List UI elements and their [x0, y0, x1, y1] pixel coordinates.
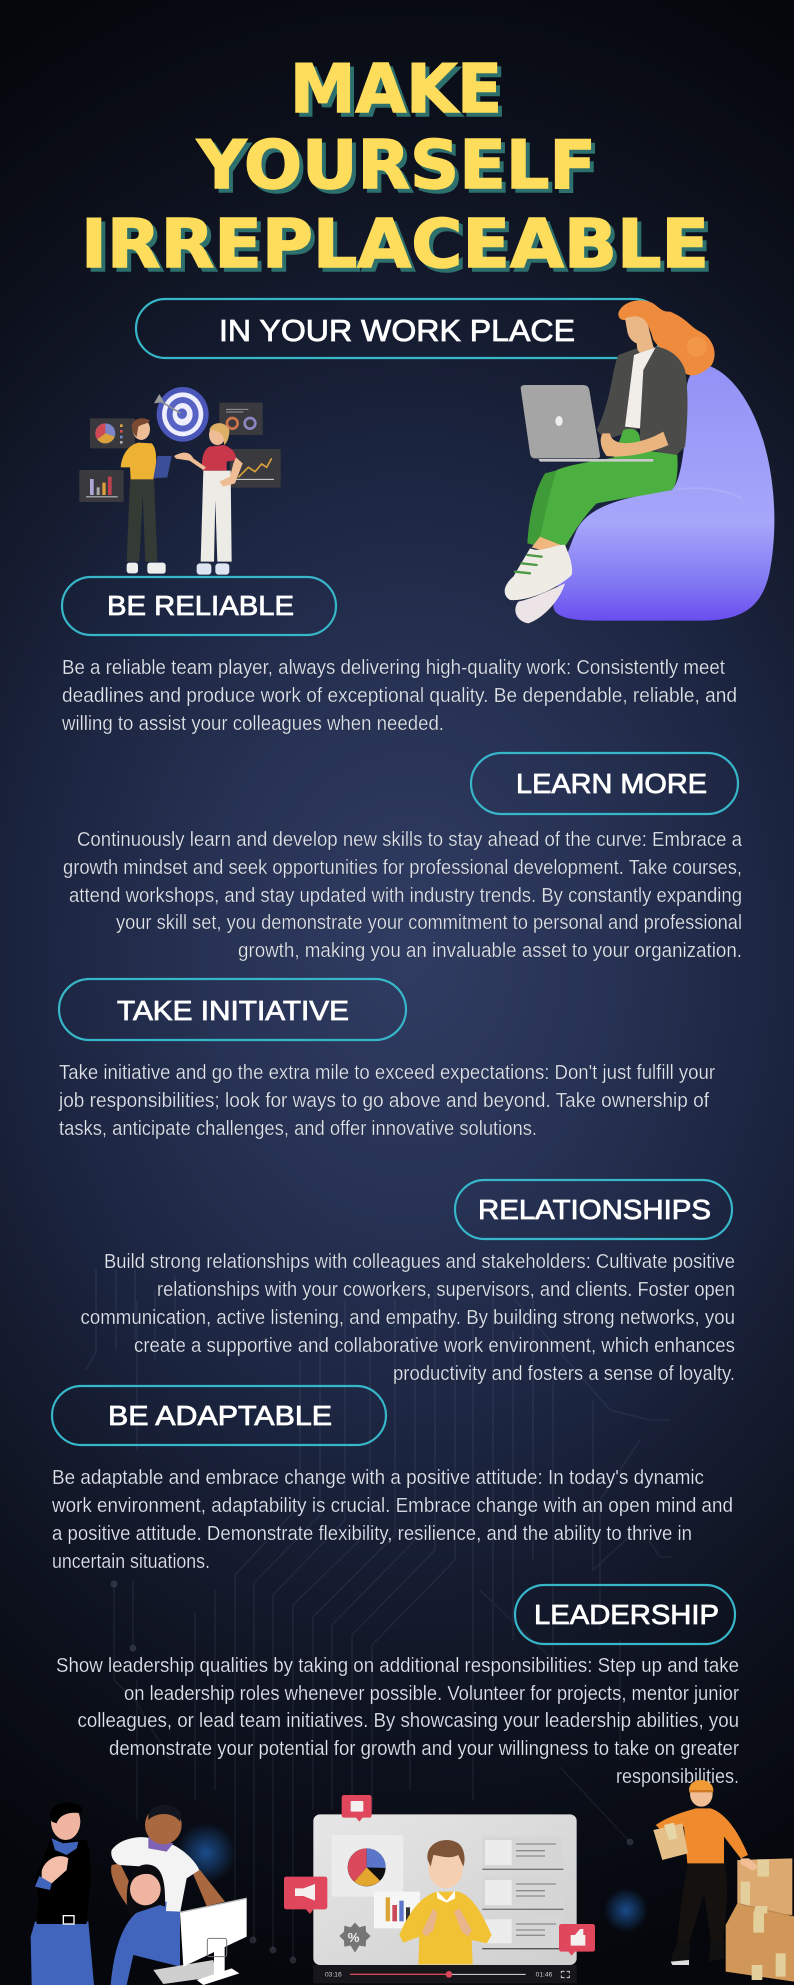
- text block: relationships: communication, active listening, and empathy. By building strong networks, you: [80, 1306, 735, 1329]
- text block: be adaptable: [51, 1466, 733, 1573]
- list rows: [482, 1837, 563, 1949]
- title: MAKE: [294, 54, 506, 132]
- subtitle pill: in your work place: [136, 299, 664, 358]
- person: woman in red shirt: [174, 423, 243, 575]
- text block: learn more: Continuously learn and develop new skills to stay ahead of the curve: Embrace a: [77, 828, 743, 851]
- text block: leadership: colleagues, or lead team initiatives. By showcasing your leadership abilities, you: [78, 1709, 739, 1732]
- heading pill: be adaptable: [52, 1386, 386, 1445]
- text block: leadership: [56, 1654, 739, 1788]
- text block: learn more: growth, making you an invaluable asset to your organization.: [238, 939, 742, 962]
- title: IRREPLACEABLE: [85, 209, 713, 287]
- text block: take initiative: tasks, anticipate challenges, and offer innovative solutions.: [59, 1117, 537, 1140]
- icon: computer monitor and keyboard: [153, 1898, 247, 1985]
- text block: be adaptable: uncertain situations.: [52, 1550, 210, 1573]
- heading pill: learn more: [471, 753, 738, 814]
- text block: leadership: on leadership roles whenever possible. Volunteer for projects, mentor junior: [124, 1682, 739, 1705]
- person: man in black sweater: [31, 1802, 94, 1985]
- text block: take initiative: job responsibilities; look for ways to go above and beyond. Take ownership of: [58, 1089, 709, 1112]
- heading pill: take initiative: [59, 979, 406, 1040]
- illustration: two colleagues with charts and target: [79, 387, 281, 575]
- icon: chat bubble: [342, 1795, 372, 1822]
- chart panel: rising line: [230, 449, 281, 488]
- illustration: three coworkers at a computer: [31, 1802, 247, 1985]
- text block: leadership: Show leadership qualities by taking on additional responsibilities: Step up and take: [56, 1654, 739, 1677]
- heading pill: be reliable: BE RELIABLE: [107, 590, 294, 621]
- text block: relationships: relationships with your coworkers, supervisors, and clients. Foster open: [157, 1278, 735, 1301]
- text block: be adaptable: Be adaptable and embrace change with a positive attitude: In today's dynamic: [52, 1466, 704, 1489]
- chart panel: pie: [90, 418, 135, 448]
- video control bar: 01:46: [536, 1972, 553, 1979]
- chart panel: bars: [79, 470, 124, 502]
- heading pill: learn more: LEARN MORE: [516, 768, 707, 799]
- text block: learn more: [63, 828, 743, 962]
- heading pill: be reliable: [62, 577, 336, 635]
- text block: leadership: demonstrate your potential for growth and your willingness to take on greater: [109, 1737, 739, 1760]
- heading pill: leadership: LEADERSHIP: [534, 1599, 719, 1630]
- title: IRREPLACEABLE: [81, 205, 709, 283]
- illustration: online video panel with presenter: [284, 1795, 595, 1983]
- heading pill: take initiative: TAKE INITIATIVE: [117, 995, 349, 1026]
- heading pill: relationships: RELATIONSHIPS: [478, 1194, 711, 1225]
- text block: relationships: productivity and fosters a sense of loyalty.: [393, 1362, 735, 1385]
- person: woman in white top: [111, 1805, 225, 1913]
- text block: be adaptable: work environment, adaptability is crucial. Embrace change with an open mind and: [51, 1494, 733, 1517]
- text block: be reliable: willing to assist your colleagues when needed.: [61, 712, 444, 735]
- icon: megaphone bubble: [284, 1877, 327, 1914]
- text block: be reliable: [61, 656, 737, 735]
- text block: relationships: create a supportive and collaborative work environment, which enhances: [134, 1334, 735, 1357]
- text block: relationships: [80, 1250, 735, 1385]
- text block: be reliable: deadlines and produce work of exceptional quality. Be dependable, reliable, and: [62, 684, 737, 707]
- presenter in yellow sweater: [399, 1840, 492, 1964]
- heading pill: leadership: [515, 1585, 735, 1644]
- title: [81, 50, 713, 287]
- chart panel: donuts: [219, 403, 263, 435]
- video control bar: 03:16: [325, 1972, 342, 1979]
- video window: [313, 1814, 577, 1965]
- bar chart card: [374, 1892, 420, 1928]
- text block: take initiative: Take initiative and go the extra mile to exceed expectations: Don't just fulfill your: [59, 1061, 715, 1084]
- text block: leadership: responsibilities.: [616, 1765, 739, 1788]
- discount badge: [339, 1923, 371, 1953]
- icon: target: [154, 387, 209, 442]
- text block: learn more: attend workshops, and stay updated with industry trends. By constantly expanding: [69, 884, 742, 907]
- person: man in yellow sweater: [121, 418, 172, 574]
- discount badge: %: [348, 1930, 360, 1945]
- heading pill: relationships: [455, 1180, 732, 1239]
- text block: be adaptable: a positive attitude. Demonstrate flexibility, resilience, and the ability to thrive in: [52, 1522, 692, 1545]
- pie chart card: [332, 1835, 403, 1897]
- text block: take initiative: [58, 1061, 715, 1140]
- text block: be reliable: Be a reliable team player, always delivering high-quality work: Consistently meet: [62, 656, 725, 679]
- title: YOURSELF: [196, 126, 596, 204]
- title: YOURSELF: [200, 130, 600, 208]
- icon: thumbs up bubble: [559, 1924, 595, 1956]
- person: smiling woman in blue turtleneck: [111, 1864, 180, 1985]
- text block: relationships: Build strong relationships with colleagues and stakeholders: Cultivate positive: [104, 1250, 735, 1273]
- illustration: woman with laptop on beanbag: [505, 300, 774, 623]
- title: MAKE: [290, 50, 502, 128]
- illustration: delivery man with boxes: [653, 1780, 794, 1982]
- subtitle pill: in your work place: IN YOUR WORK PLACE: [219, 313, 575, 348]
- video control bar: [313, 1965, 577, 1983]
- heading pill: be adaptable: BE ADAPTABLE: [108, 1400, 332, 1431]
